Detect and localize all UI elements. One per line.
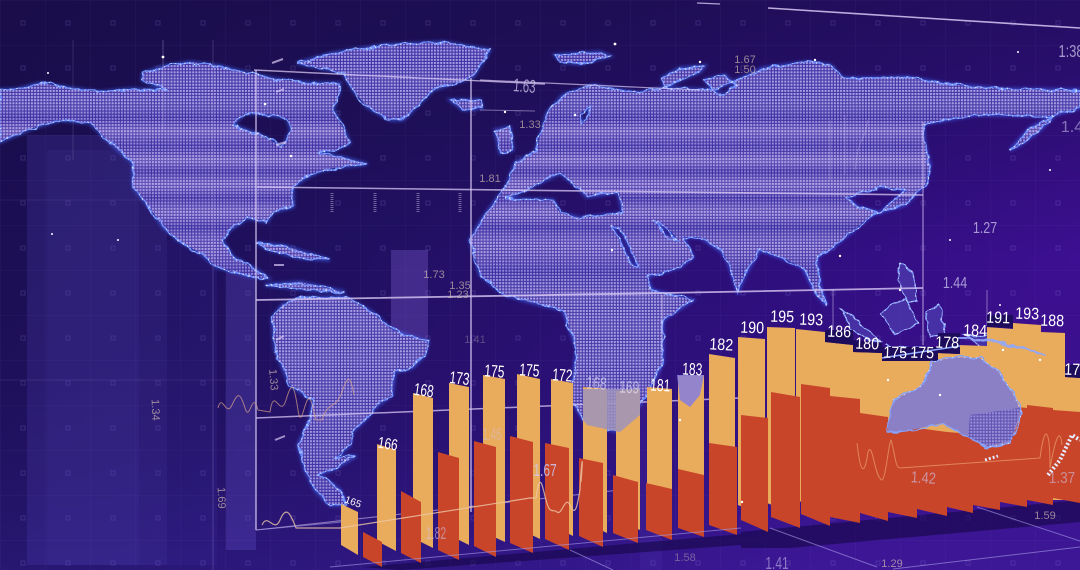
line chart waves — [218, 115, 1062, 528]
small axis numbers: 1.29 — [881, 558, 903, 570]
bar value labels: 184 — [963, 322, 988, 341]
bar value labels: 166 — [377, 433, 399, 454]
small axis numbers: 1.41 — [464, 334, 486, 346]
bar value labels: 181 — [650, 377, 671, 396]
small axis numbers: 1.42 — [910, 469, 936, 488]
bar value labels: 193 — [799, 311, 823, 330]
small axis numbers: 1.58 — [674, 552, 696, 564]
bar value labels: 175 — [883, 344, 907, 363]
small axis numbers: 1.37 — [1049, 470, 1075, 487]
small axis numbers: 1.69 — [215, 487, 227, 509]
bar value labels: 175 — [519, 361, 540, 381]
dark tabs behind bar labels — [825, 315, 1080, 378]
small axis numbers: 1.73 — [423, 269, 445, 281]
bar value labels: 193 — [1015, 305, 1039, 324]
bar value labels: 186 — [827, 323, 851, 342]
small axis numbers: 1.59 — [1034, 510, 1056, 522]
bar value labels: 182 — [709, 335, 734, 355]
small axis numbers: 1.35 — [449, 280, 471, 292]
bar chart: back series (yellow) — [341, 323, 1080, 555]
bar value labels: 175 — [484, 362, 505, 382]
bar value labels: 165 — [343, 495, 363, 511]
panel: translucent side columns — [27, 135, 662, 570]
bar value labels: 172 — [552, 366, 573, 386]
small axis numbers: 1.63 — [512, 75, 537, 98]
small axis numbers: 1.44 — [943, 275, 967, 292]
islands: Indonesia, Philippines, New Guinea — [842, 262, 1045, 356]
small axis numbers — [149, 42, 1080, 570]
bar value labels: 175 — [910, 344, 934, 363]
bar value labels: 188 — [1040, 312, 1064, 331]
bar value labels: 168 — [586, 374, 607, 394]
bar value labels: 168 — [412, 381, 435, 402]
small axis numbers: 1.81 — [479, 173, 501, 185]
bar value labels: 180 — [855, 335, 879, 354]
small axis numbers: 1.67 — [533, 461, 557, 481]
small axis numbers: 1.46 — [483, 425, 501, 445]
bar value labels: 169 — [619, 379, 640, 398]
sparkle points — [47, 43, 1051, 503]
small axis numbers: 1.23 — [447, 289, 469, 301]
small axis numbers: 1.33 — [266, 369, 280, 391]
bar value labels: 178 — [935, 334, 959, 353]
bar value labels — [343, 305, 1080, 511]
bar value labels: 190 — [740, 319, 764, 338]
small axis numbers: 1.33 — [519, 119, 541, 131]
map overlay on bars: Africa tip, Madagascar, Australia — [583, 338, 1080, 475]
bar shadows — [363, 500, 1080, 570]
bar value labels: 183 — [682, 361, 703, 380]
bar value labels: 191 — [986, 309, 1010, 328]
bar chart: front series (red) — [363, 384, 1080, 567]
bar value labels: 195 — [770, 308, 794, 327]
small axis numbers: 1.50 — [734, 64, 756, 76]
small axis numbers: 1.82 — [426, 524, 446, 544]
small axis numbers: 1.27 — [973, 220, 997, 237]
small axis numbers: 1.34 — [149, 399, 161, 421]
small axis numbers: 1.67 — [734, 54, 756, 66]
floor grid lines — [256, 507, 1080, 570]
bar value labels: 173 — [449, 369, 470, 390]
